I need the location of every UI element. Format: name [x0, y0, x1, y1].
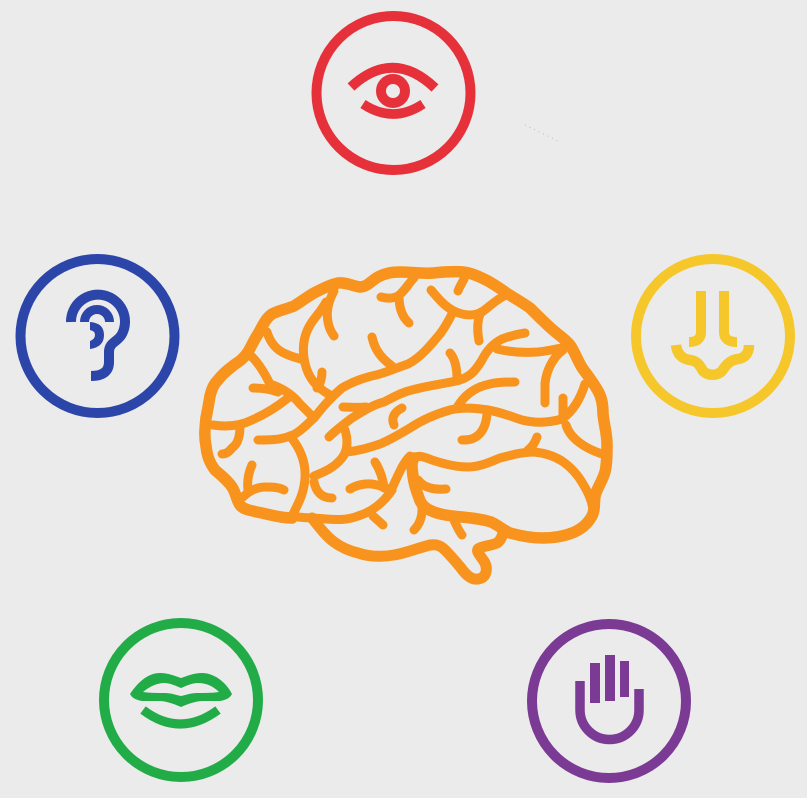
upper eyelid	[351, 68, 435, 88]
inner ear	[84, 310, 110, 322]
lower lip	[143, 710, 218, 724]
tragus	[90, 322, 104, 349]
palm	[580, 681, 639, 740]
brain temporal lobe upper edge	[412, 452, 593, 510]
brain inner folds	[213, 278, 602, 535]
icon: ear sense (hearing)	[20, 259, 174, 413]
nostrils	[676, 345, 749, 375]
icon: nose sense (smell)	[636, 259, 790, 413]
ring	[316, 16, 470, 170]
right side of nose	[724, 291, 737, 342]
iris	[381, 79, 405, 103]
upper lip and mouth	[130, 673, 232, 707]
icon: eye sense (sight)	[316, 16, 470, 170]
ring	[532, 624, 686, 778]
finger 1	[590, 663, 600, 703]
ring	[104, 623, 258, 777]
icon: hand sense (touch)	[532, 624, 686, 778]
lower eyelid	[363, 104, 423, 114]
icon: mouth sense (taste)	[104, 623, 258, 777]
finger 2	[605, 655, 615, 701]
icon: brain	[205, 272, 607, 579]
brain outer contour	[205, 272, 607, 538]
ring	[20, 259, 174, 413]
outer ear	[71, 295, 125, 376]
finger 3	[620, 661, 629, 697]
left side of nose	[689, 291, 701, 342]
ring	[636, 259, 790, 413]
brain lower lobe and stem	[312, 518, 503, 579]
